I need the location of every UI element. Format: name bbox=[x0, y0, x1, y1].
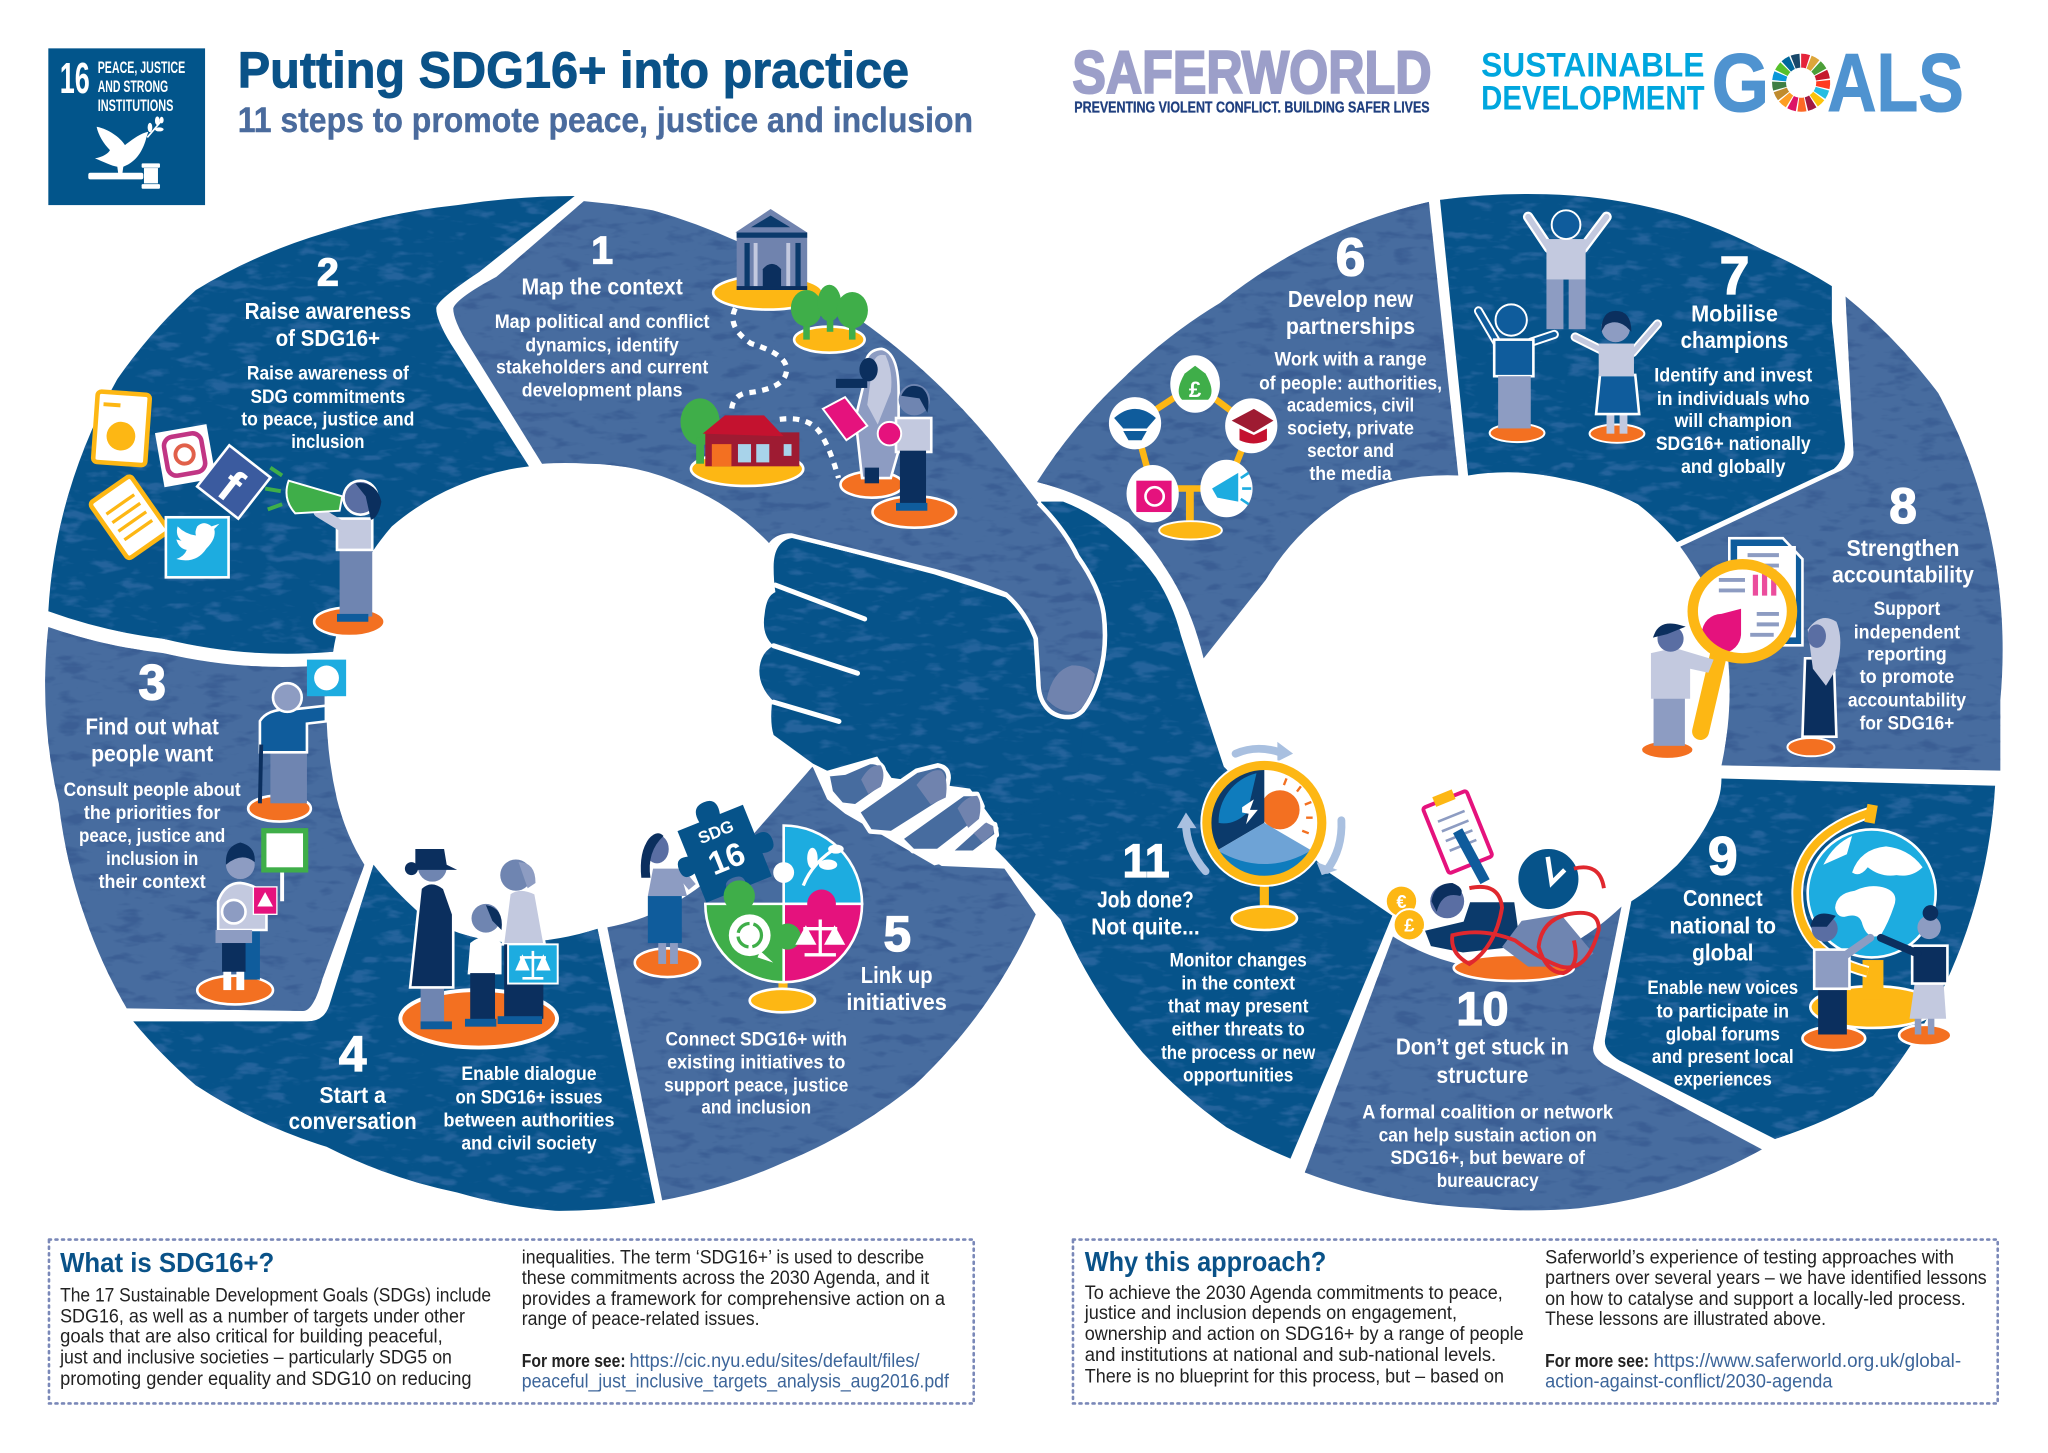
left column text: There is no blueprint for this process, but – based on bbox=[1085, 1367, 1504, 1388]
number 5: 5 bbox=[884, 906, 911, 962]
step 8 heading bbox=[1832, 535, 1974, 588]
step 3 body: the priorities for bbox=[84, 803, 221, 824]
gripping fingers bbox=[813, 756, 999, 865]
icon: facebook: f bbox=[209, 460, 254, 511]
step 8 body: reporting bbox=[1867, 645, 1947, 666]
step 6 heading bbox=[1286, 286, 1415, 339]
segment shape bbox=[1440, 194, 1845, 542]
number 3: 3 bbox=[138, 655, 166, 711]
left column text: justice and inclusion depends on engagement, bbox=[1084, 1303, 1457, 1324]
icon: facebook bbox=[194, 445, 270, 522]
icon: man with badge bbox=[872, 384, 956, 528]
further reading link: https://cic.nyu.edu/sites/default/files/ bbox=[630, 1351, 920, 1372]
further reading link: For more see: bbox=[1545, 1350, 1649, 1371]
icon: woman inspecting bbox=[1787, 618, 1840, 756]
left column text: goals that are also critical for building peaceful, bbox=[60, 1327, 443, 1348]
panel: step 6 develop new partnerships bbox=[1037, 202, 1458, 658]
icon: man with megaphone bbox=[265, 468, 385, 636]
Saferworld logo: SAFERWORLD bbox=[1072, 39, 1432, 106]
Sustainable Development Goals logo: G bbox=[1712, 38, 1769, 129]
step 10 heading: structure bbox=[1436, 1062, 1528, 1088]
step 2 body: SDG commitments bbox=[250, 387, 405, 408]
left column text: SDG16, as well as a number of targets under other bbox=[60, 1307, 465, 1328]
further reading link: action-against-conflict/2030-agenda bbox=[1545, 1372, 1833, 1393]
step 7 body: will champion bbox=[1674, 411, 1792, 432]
step 11 body: either threats to bbox=[1172, 1019, 1305, 1040]
icon: twitter bbox=[166, 517, 229, 577]
step 10 heading: Don’t get stuck in bbox=[1396, 1034, 1569, 1060]
step 2 heading: of SDG16+ bbox=[276, 325, 380, 351]
right column text: inequalities. The term ‘SDG16+’ is used to describe bbox=[522, 1248, 924, 1269]
step 10 heading bbox=[1396, 1034, 1569, 1088]
segment shape bbox=[1680, 297, 2003, 771]
step 7 body: Identify and invest bbox=[1654, 365, 1813, 386]
step 1 body bbox=[495, 312, 710, 401]
step 3 body: peace, justice and bbox=[79, 826, 225, 847]
step 2 heading bbox=[245, 298, 411, 351]
left column text: The 17 Sustainable Development Goals (SDGs) include bbox=[60, 1286, 491, 1307]
step 3 body: Consult people about bbox=[64, 780, 241, 801]
panel: step 7 mobilise champions bbox=[1440, 194, 1845, 542]
step 11 body bbox=[1161, 951, 1316, 1087]
step 11 heading: Not quite... bbox=[1091, 913, 1200, 939]
step 7 body: and globally bbox=[1681, 457, 1786, 478]
icon: woman holding puzzle piece bbox=[635, 784, 785, 977]
step 7 body bbox=[1654, 365, 1813, 478]
icon: partnership ring of actors: £ bbox=[1189, 377, 1202, 402]
icon: champion on shoulders bbox=[1528, 210, 1607, 329]
heading: Why this approach? bbox=[1085, 1246, 1326, 1277]
icon: dotted route bbox=[731, 308, 839, 478]
step 3 heading bbox=[86, 714, 219, 767]
step 4 heading: conversation bbox=[289, 1108, 417, 1134]
dotted box bbox=[1073, 1240, 1998, 1403]
right column text: These lessons are illustrated above. bbox=[1545, 1309, 1826, 1330]
SDG 16 badge: AND STRONG bbox=[98, 77, 168, 96]
step 6 heading: partnerships bbox=[1286, 313, 1415, 339]
step 4 body: and civil society bbox=[461, 1133, 597, 1154]
number 2: 2 bbox=[317, 252, 339, 295]
step 2 body: inclusion bbox=[291, 432, 364, 453]
icon: left champion bbox=[1479, 304, 1554, 442]
icon: trees bbox=[791, 285, 868, 353]
icon: old man with cyan sign bbox=[248, 660, 346, 822]
step 4 body: on SDG16+ issues bbox=[456, 1087, 602, 1108]
number 4: 4 bbox=[339, 1026, 367, 1082]
step 5 body: existing initiatives to bbox=[667, 1052, 845, 1073]
segment shape bbox=[1605, 778, 1995, 1139]
step 5 body bbox=[664, 1029, 848, 1119]
icon: man tangled in red tape: £ bbox=[1404, 914, 1414, 935]
dotted box bbox=[49, 1240, 974, 1403]
step 11 body: opportunities bbox=[1183, 1066, 1293, 1087]
step 9 body: and present local bbox=[1652, 1047, 1794, 1068]
step 1 body: Map political and conflict bbox=[495, 312, 710, 333]
arm and gripping hand shape bbox=[759, 502, 1392, 1159]
icon: three people talking bbox=[400, 849, 558, 1048]
SDG 16 badge: 16 bbox=[60, 55, 90, 103]
step 9 heading: national to bbox=[1670, 912, 1776, 938]
right column text bbox=[1545, 1248, 1987, 1330]
icon: text document bbox=[89, 475, 169, 559]
title: Putting SDG16+ into practice bbox=[238, 42, 909, 99]
step 9 heading: global bbox=[1692, 939, 1753, 965]
step 10 body: bureaucracy bbox=[1437, 1171, 1539, 1192]
left column text: and institutions at national and sub-national levels. bbox=[1085, 1345, 1496, 1366]
step 3 body: inclusion in bbox=[106, 849, 198, 870]
left column text bbox=[1084, 1283, 1524, 1388]
step 1 body: dynamics, identify bbox=[525, 335, 679, 356]
step 11 body: Monitor changes bbox=[1170, 951, 1307, 972]
step 2 body bbox=[241, 363, 414, 453]
step 2 body: Raise awareness of bbox=[247, 363, 409, 384]
step 9 body bbox=[1647, 978, 1798, 1090]
Sustainable Development Goals logo: DEVELOPMENT bbox=[1481, 80, 1705, 118]
right column text: Saferworld’s experience of testing approaches with bbox=[1545, 1248, 1954, 1269]
right column text bbox=[522, 1248, 945, 1330]
step 5 heading bbox=[846, 962, 947, 1015]
Saferworld logo: PREVENTING VIOLENT CONFLICT. BUILDING SAFER LIVES bbox=[1074, 99, 1430, 116]
Sustainable Development Goals logo: SUSTAINABLE bbox=[1481, 46, 1704, 84]
panel: step 4 start a conversation bbox=[133, 849, 655, 1211]
panel: step 8 strengthen accountability bbox=[1641, 297, 2003, 771]
step 10 body: A formal coalition or network bbox=[1362, 1103, 1614, 1124]
panel: step 5 link up initiatives bbox=[607, 756, 1036, 1200]
step 11 heading bbox=[1091, 886, 1200, 939]
panel: step 10 don't get stuck in structure bbox=[1305, 784, 1762, 1210]
step 9 body: global forums bbox=[1666, 1024, 1780, 1045]
icon: woman holding puzzle piece: SDG bbox=[695, 817, 737, 848]
segment shape bbox=[45, 627, 364, 1011]
icon: right champion bbox=[1575, 311, 1657, 443]
step 5 body: and inclusion bbox=[701, 1098, 811, 1119]
further reading link: peaceful_just_inclusive_targets_analysis_aug2016.pdf bbox=[522, 1372, 950, 1393]
step 3 heading: people want bbox=[91, 741, 214, 767]
SDG 16 badge bbox=[48, 48, 205, 205]
step 8 body: accountability bbox=[1848, 690, 1966, 711]
step 5 heading: Link up bbox=[861, 962, 933, 988]
panel: step 2 raise awareness bbox=[48, 196, 575, 654]
step 8 body: for SDG16+ bbox=[1860, 714, 1954, 735]
step 6 body: the media bbox=[1309, 464, 1392, 485]
right column text: partners over several years – we have identified lessons bbox=[1545, 1268, 1987, 1289]
step 11 body: the process or new bbox=[1161, 1043, 1316, 1064]
step 1 body: development plans bbox=[522, 380, 682, 401]
step 11 body: that may present bbox=[1168, 997, 1309, 1018]
number 11: 11 bbox=[1123, 834, 1170, 887]
icon: man tangled in red tape: € bbox=[1396, 891, 1407, 912]
step 8 heading: Strengthen bbox=[1847, 535, 1960, 561]
segment shape bbox=[133, 865, 655, 1211]
thumb outline bbox=[771, 503, 1105, 717]
left column text: To achieve the 2030 Agenda commitments to peace, bbox=[1085, 1283, 1503, 1304]
step 5 body: support peace, justice bbox=[664, 1076, 848, 1097]
step 7 body: SDG16+ nationally bbox=[1656, 434, 1811, 455]
thumb nail bbox=[1047, 665, 1095, 712]
right column text: range of peace-related issues. bbox=[522, 1309, 760, 1330]
step 11 body: in the context bbox=[1181, 974, 1296, 995]
step 2 body: to peace, justice and bbox=[241, 409, 414, 430]
segment shape bbox=[1037, 202, 1458, 658]
step 4 heading: Start a bbox=[319, 1082, 386, 1108]
right column text: provides a framework for comprehensive action on a bbox=[522, 1289, 945, 1310]
number 6: 6 bbox=[1336, 229, 1365, 288]
step 10 body: SDG16+, but beware of bbox=[1390, 1148, 1586, 1169]
step 8 body: Support bbox=[1874, 599, 1941, 620]
left column text: promoting gender equality and SDG10 on reducing bbox=[60, 1369, 472, 1390]
step 6 body bbox=[1259, 350, 1442, 485]
finger separators bbox=[774, 585, 865, 721]
step 6 body: of people: authorities, bbox=[1259, 373, 1442, 394]
number 8: 8 bbox=[1889, 478, 1917, 534]
icon: instagram bbox=[155, 424, 216, 487]
icon: man inspecting bbox=[1641, 625, 1714, 759]
step 8 body bbox=[1848, 599, 1966, 735]
further reading link: For more see: bbox=[522, 1350, 626, 1371]
number 9: 9 bbox=[1708, 827, 1738, 886]
panel: step 3 find out what people want bbox=[45, 627, 364, 1011]
step 11 heading: Job done? bbox=[1097, 886, 1194, 912]
icon: weather globe with cycle arrows bbox=[1177, 742, 1341, 930]
segment shape bbox=[1305, 906, 1762, 1210]
SDG 16 badge: PEACE, JUSTICE bbox=[98, 58, 185, 77]
step 2 heading: Raise awareness bbox=[245, 298, 411, 324]
left column text: ownership and action on SDG16+ by a range of people bbox=[1085, 1324, 1524, 1345]
step 6 body: sector and bbox=[1307, 441, 1394, 462]
segment shape with thumb bbox=[453, 201, 1105, 717]
icon: man pointing at globe bbox=[1802, 915, 1870, 1050]
step 8 body: independent bbox=[1854, 622, 1961, 643]
panel: step 9 connect national to global bbox=[1605, 778, 1995, 1139]
step 3 body bbox=[64, 780, 241, 893]
step 6 body: society, private bbox=[1287, 418, 1414, 439]
step 6 body: academics, civil bbox=[1287, 395, 1414, 416]
step 4 body bbox=[443, 1064, 615, 1154]
step 10 body: can help sustain action on bbox=[1379, 1126, 1597, 1147]
icon: house and tree bbox=[680, 398, 803, 486]
step 7 heading: champions bbox=[1681, 327, 1788, 353]
heading: What is SDG16+? bbox=[60, 1247, 274, 1278]
further reading link: https://www.saferworld.org.uk/global- bbox=[1654, 1351, 1961, 1372]
Sustainable Development Goals logo bbox=[1481, 38, 1964, 129]
SDG 16 badge: INSTITUTIONS bbox=[98, 96, 173, 115]
panel: what is SDG16+ bbox=[49, 1240, 974, 1403]
step 10 body bbox=[1362, 1103, 1614, 1192]
number 7: 7 bbox=[1720, 247, 1749, 306]
step 4 heading bbox=[289, 1082, 417, 1134]
step 7 heading: Mobilise bbox=[1691, 300, 1778, 326]
step 3 heading: Find out what bbox=[86, 714, 219, 740]
right column text: on how to catalyse and support a locally-led process. bbox=[1545, 1289, 1966, 1310]
step 4 body: between authorities bbox=[443, 1110, 615, 1131]
step 7 body: in individuals who bbox=[1657, 389, 1810, 410]
step 3 body: their context bbox=[99, 872, 206, 893]
step 1 heading: Map the context bbox=[521, 274, 683, 300]
icon: woman pointing at globe bbox=[1881, 905, 1951, 1046]
further reading link bbox=[1545, 1350, 1961, 1393]
subtitle: 11 steps to promote peace, justice and inclusion bbox=[238, 101, 973, 140]
step 1 body: stakeholders and current bbox=[496, 358, 709, 379]
icon: world globe on stand bbox=[1797, 804, 1936, 1028]
segment shape bbox=[48, 196, 575, 654]
icon: report under magnifying glass bbox=[1693, 538, 1802, 731]
right column text: these commitments across the 2030 Agenda, and it bbox=[522, 1268, 930, 1289]
icon: woman with book bbox=[823, 349, 903, 498]
step 5 heading: initiatives bbox=[846, 989, 947, 1015]
step 9 body: experiences bbox=[1674, 1069, 1772, 1090]
segment shape bbox=[607, 767, 1036, 1200]
number 10: 10 bbox=[1456, 982, 1509, 1035]
left column text bbox=[59, 1286, 491, 1390]
further reading link bbox=[522, 1350, 950, 1393]
panel: step 1 map the context bbox=[453, 201, 1105, 717]
step 6 heading: Develop new bbox=[1288, 286, 1413, 312]
panel: step 11 job done, with arm and hand bbox=[759, 502, 1392, 1159]
icon: man tangled in red tape bbox=[1386, 784, 1604, 981]
icon: report document bbox=[93, 391, 150, 465]
Sustainable Development Goals logo: ALS bbox=[1827, 38, 1964, 129]
step 9 heading bbox=[1670, 885, 1776, 965]
step 8 heading: accountability bbox=[1832, 562, 1974, 588]
left column text: just and inclusive societies – particularly SDG5 on bbox=[59, 1348, 452, 1369]
icon: government building bbox=[713, 209, 823, 310]
step 8 body: to promote bbox=[1860, 667, 1954, 688]
step 9 body: to participate in bbox=[1656, 1001, 1789, 1022]
step 9 body: Enable new voices bbox=[1647, 978, 1798, 999]
icon: woman and girl with signs bbox=[197, 831, 306, 1004]
icon: puzzle globe with peace, justice and inclusion pieces bbox=[705, 826, 862, 1012]
step 6 body: Work with a range bbox=[1274, 350, 1427, 371]
panel: why this approach bbox=[1073, 1240, 1998, 1403]
icon: woman holding puzzle piece: 16 bbox=[703, 834, 750, 882]
step 9 heading: Connect bbox=[1683, 885, 1763, 911]
step 7 heading bbox=[1681, 300, 1788, 353]
number 1: 1 bbox=[591, 229, 613, 272]
step 4 body: Enable dialogue bbox=[461, 1064, 597, 1085]
icon: partnership ring of actors bbox=[1109, 355, 1277, 539]
step 5 body: Connect SDG16+ with bbox=[665, 1029, 847, 1050]
